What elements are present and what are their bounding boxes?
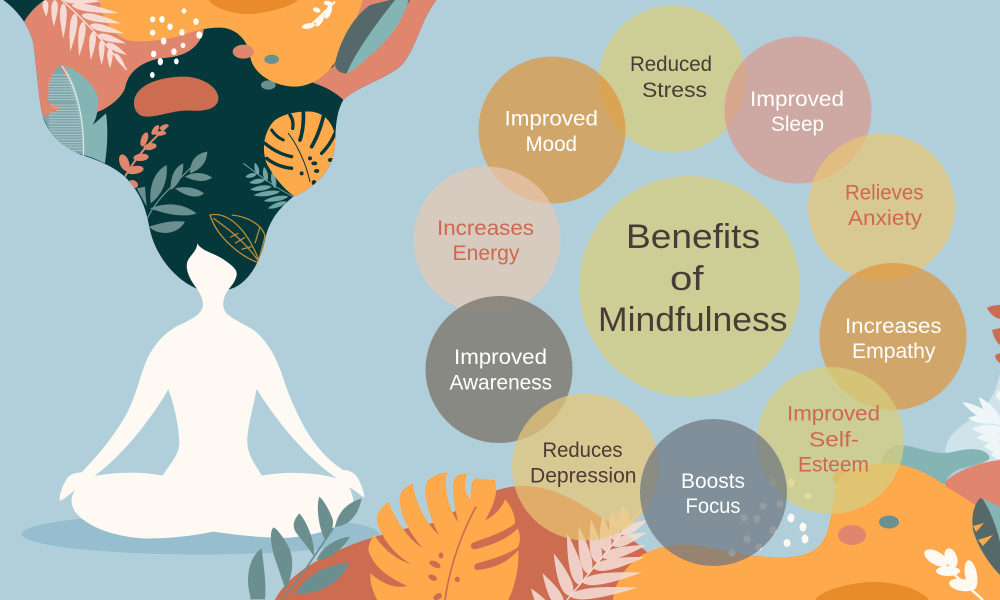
- circle: Improved Self-Esteem: [757, 367, 904, 514]
- floor shadow: [22, 514, 380, 554]
- circle: Improved Self-Esteem: Esteem: [798, 454, 869, 476]
- circle: Relieves Anxiety: [808, 134, 955, 280]
- decorative leaf: red lobes at right edge: [987, 305, 1000, 363]
- outline leaf: gold: [210, 215, 265, 263]
- circle: Reduces Depression: Depression: [530, 464, 636, 488]
- circle: Relieves Anxiety: Anxiety: [848, 207, 923, 230]
- background shape: right light vase with fern: [945, 373, 1000, 465]
- circle: Improved Sleep: [724, 36, 872, 184]
- circle: center title Benefits of Mindfulness: of: [670, 260, 704, 298]
- leaf: bottom orange monstera: [368, 472, 520, 600]
- circle: center title Benefits of Mindfulness: [579, 176, 800, 397]
- circle: Improved Awareness: Improved: [454, 346, 547, 369]
- circle: Increases Empathy: Increases: [845, 315, 942, 338]
- sprig: salmon: [117, 123, 169, 190]
- circle: Improved Mood: Improved: [504, 108, 598, 130]
- fern: bottom white pink: [526, 503, 650, 600]
- circle: Improved Sleep: Sleep: [771, 113, 824, 136]
- dots: scattered white dots: [728, 478, 812, 556]
- circle: Increases Energy: Increases: [437, 217, 534, 240]
- circle: Boosts Focus: [640, 419, 787, 566]
- sprig: bottom right white: [921, 546, 983, 600]
- illustration: hair with tropical foliage: [0, 0, 440, 300]
- circle: Improved Awareness: [426, 296, 572, 443]
- circle: Boosts Focus: Boosts: [681, 470, 745, 493]
- circle: Reduced Stress: Stress: [642, 79, 707, 102]
- circle: Relieves Anxiety: Relieves: [845, 182, 924, 204]
- circle: Reduces Depression: Reduces: [542, 439, 622, 462]
- circle: center title Benefits of Mindfulness: Benefits: [626, 218, 760, 256]
- circle: center title Benefits of Mindfulness: Mindfulness: [598, 301, 788, 339]
- circle: Improved Sleep: Improved: [750, 88, 844, 111]
- blob: salmon spot: [838, 525, 866, 545]
- circle: Increases Energy: [414, 166, 560, 314]
- circle: Improved Self-Esteem: Self-: [809, 428, 859, 452]
- background blob: small orange: [833, 470, 851, 486]
- circle: Boosts Focus: Focus: [686, 495, 740, 518]
- circle: Improved Self-Esteem: Improved: [787, 402, 880, 426]
- illustration: meditating figure: [60, 243, 364, 538]
- circle: Reduced Stress: Reduced: [630, 53, 712, 76]
- circle: Increases Empathy: [820, 263, 966, 410]
- circle: Increases Energy: Energy: [452, 242, 520, 265]
- background blob: dark orange: [815, 582, 929, 600]
- background blob: large orange: [613, 463, 1000, 600]
- circle: Improved Awareness: Awareness: [450, 372, 552, 394]
- circle: Improved Mood: Mood: [526, 133, 577, 156]
- blob: teal spot: [879, 516, 899, 528]
- background blob: bottom right teal: [880, 445, 990, 484]
- fern: top left pale: [42, 0, 128, 71]
- background blob: bottom right salmon: [945, 460, 1000, 530]
- circle: Improved Mood: [478, 56, 626, 204]
- circle: Reduced Stress: [599, 6, 746, 152]
- circle: Reduces Depression: [512, 394, 659, 540]
- leaf: bottom green sprig: [248, 497, 362, 599]
- monstera: orange in hair: [264, 112, 335, 197]
- background hill: terracotta: [275, 486, 690, 600]
- leaf: bottom right dark banana leaf: [972, 498, 1000, 575]
- circle: Increases Empathy: Empathy: [852, 340, 936, 363]
